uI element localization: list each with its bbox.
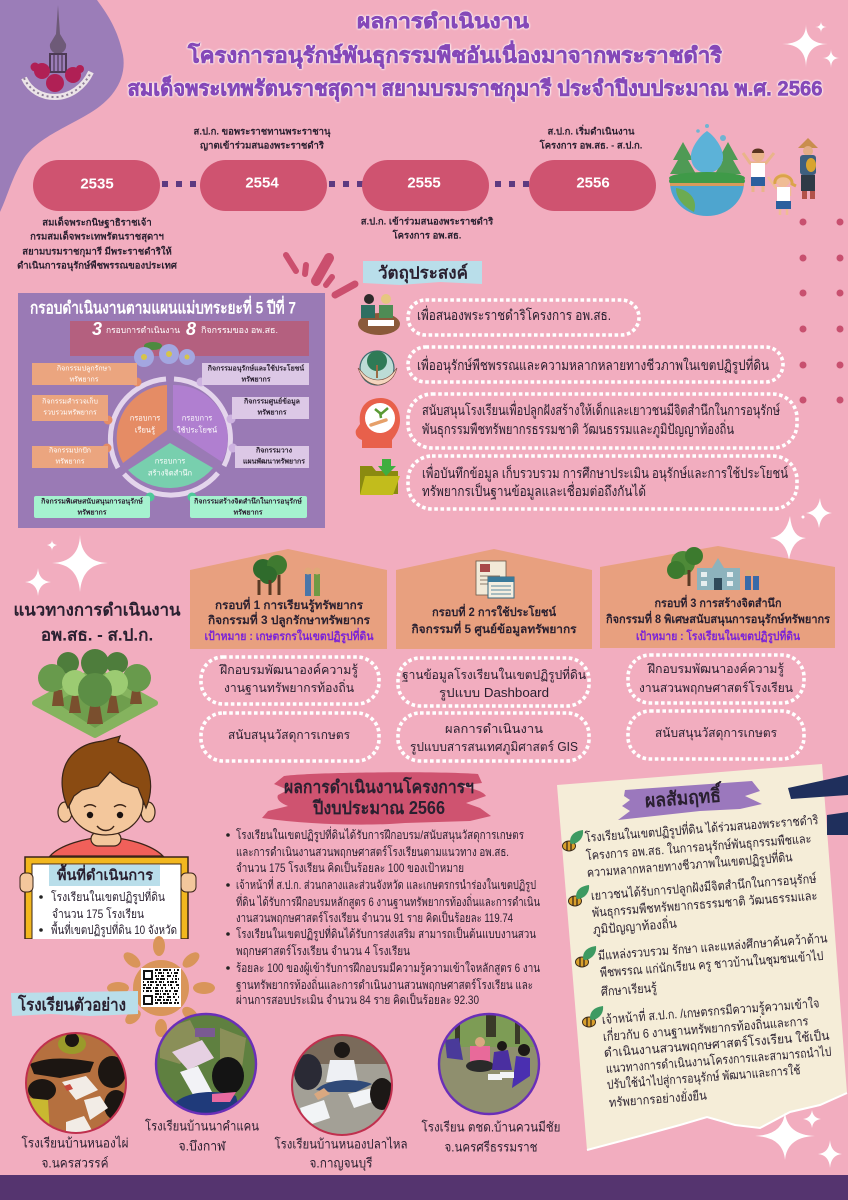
footer band — [0, 1175, 848, 1200]
icon: earth, water drop and children — [669, 124, 818, 216]
timeline — [33, 160, 656, 211]
label box: conservation use: กิจกรรมอนุรักษ์และใช้ประโยชน์ — [207, 364, 304, 372]
farmer — [798, 138, 818, 199]
label box: survey: กิจกรรมสำรวจเก็บ — [42, 396, 98, 406]
panel: framework 1 — [190, 549, 387, 761]
guideline heading: อพ.สธ. - ส.ป.ก. — [41, 626, 153, 644]
results heading: ปีงบประมาณ 2566 — [312, 798, 445, 818]
photo: Ban Na Kham Khaen school — [155, 1013, 257, 1118]
timeline note 2535 — [17, 216, 178, 272]
label box: planning: กิจกรรมวาง — [255, 446, 293, 454]
year 2555 — [362, 160, 489, 211]
outcome 4: เจ้าหน้าที่ ส.ป.ก. /เกษตรกรมีความรู้ความเข้าใจ — [601, 994, 820, 1028]
results bullet list: ผ่านการสอบประเมิน จำนวน 84 ราย คิดเป็นร้อยละ 92.30 — [236, 992, 479, 1007]
caption: school 3 — [274, 1136, 408, 1172]
activity pill: รูปแบบ Dashboard — [439, 686, 549, 701]
framework subheading band: 3 — [92, 319, 102, 339]
results heading — [262, 772, 491, 825]
year 2535 — [33, 160, 160, 211]
label box: planting — [32, 363, 137, 385]
caption: school 1: โรงเรียนบ้านหนองไผ่ — [22, 1136, 128, 1150]
framework subheading band: 8 — [186, 319, 196, 339]
outcome 4: เกี่ยวกับ 6 งานฐานทรัพยากรท้องถิ่นและการ — [602, 1012, 809, 1044]
outcome 1 — [584, 811, 819, 881]
results bullet list: งานสวนพฤกษศาสตร์โรงเรียน จำนวน 91 ราย คิดเป็นร้อยละ 119.74 — [236, 910, 513, 925]
outcome 2: พันธุกรรมพืชทรัพยากรธรรมชาติ วัฒนธรรมและ — [591, 889, 818, 921]
timeline note 2535: สยามบรมราชกุมารี มีพระราชดำริให้ — [22, 246, 172, 258]
icon: tree and school — [667, 547, 759, 590]
outcome 2 — [590, 872, 818, 938]
icon: two people with books — [358, 294, 400, 335]
timeline note 2554 — [194, 126, 331, 152]
objectives heading: วัตถุประสงค์ — [378, 262, 468, 284]
activity pill: ผลการดำเนินงาน — [445, 722, 543, 736]
outcomes heading — [618, 780, 762, 820]
label box: special support: กิจกรรมพิเศษสนับสนุนการอนุรักษ์ — [40, 496, 143, 506]
timeline note 2554: ส.ป.ก. ขอพระราชทานพระราชานุ — [194, 126, 331, 138]
year 2554: 2554 — [245, 174, 279, 192]
label box: conservation use: ทรัพยากร — [241, 376, 271, 384]
year 2556: 2556 — [576, 174, 610, 192]
house 1 — [190, 549, 387, 649]
panel: framework 2 — [396, 549, 592, 761]
pie segment: awareness: สร้างจิตสำนึก — [148, 468, 192, 478]
title — [128, 11, 822, 102]
timeline note 2555 — [361, 216, 494, 242]
activity pill: งานฐานทรัพยากรท้องถิ่น — [224, 679, 354, 695]
panel: framework 2: กรอบที่ 2 การใช้ประโยชน์ — [432, 603, 556, 619]
caption: school 2 — [145, 1118, 259, 1154]
label box: conservation use — [202, 363, 309, 385]
timeline note 2556: โครงการ อพ.สธ. - ส.ป.ก. — [539, 140, 642, 152]
timeline note 2554: ญาตเข้าร่วมสนองพระราชดำริ — [200, 140, 325, 152]
bee 4 — [582, 1006, 603, 1027]
photo: Ban Nong Phai school — [25, 1032, 128, 1134]
tape pieces — [788, 775, 848, 835]
boy — [743, 148, 774, 192]
label box: data centre: กิจกรรมศูนย์ข้อมูล — [243, 396, 300, 406]
panel: framework 3 — [600, 546, 835, 759]
cut-off strip under the board — [20, 939, 190, 942]
connector dots — [162, 181, 196, 187]
sparkles: middle right — [770, 498, 832, 560]
icons: bees — [562, 830, 603, 1027]
operating area heading — [49, 864, 160, 886]
objective 1: เพื่อสนองพระราชดำริโครงการ อพ.สธ. — [417, 306, 611, 323]
outcome 4: ปรับใช้นำไปสู่การอนุรักษ์ พัฒนาและการใช้ — [606, 1063, 801, 1093]
results bullet list: ฐานทรัพยากรท้องถิ่นและการดำเนินงานสวนพฤกษศาสตร์โรงเรียน และ — [236, 976, 533, 992]
guideline heading: แนวทางการดำเนินงาน — [14, 600, 181, 620]
timeline note 2556 — [539, 124, 642, 152]
activity pill — [201, 713, 379, 761]
QR code — [141, 968, 181, 1007]
icon: trees and farmers — [253, 555, 320, 596]
label box: protection: กิจกรรมปกปัก — [49, 446, 91, 454]
sample schools heading: โรงเรียนตัวอย่าง — [17, 994, 126, 1014]
panel: framework 2: กิจกรรมที่ 5 ศูนย์ข้อมูลทรัพยากร — [411, 620, 577, 637]
activity pill — [628, 711, 804, 759]
timeline note 2555: ส.ป.ก. เข้าร่วมสนองพระราชดำริ — [361, 216, 494, 228]
sun with QR code — [107, 936, 215, 1037]
results bullet list: โรงเรียนในเขตปฏิรูปที่ดินได้รับการส่งเสริม สามารถเป็นต้นแบบงานสวน — [236, 925, 536, 942]
panel: framework 3: กรอบที่ 3 การสร้างจิตสำนึก — [654, 594, 782, 610]
activity pill: รูปแบบสารสนเทศภูมิศาสตร์ GIS — [410, 740, 578, 755]
timeline note 2535: ดำเนินการอนุรักษ์พืชพรรณของประเทศ — [17, 260, 178, 272]
outcome 3: ศึกษาเรียนรู้ — [600, 981, 658, 1000]
outcome 4 — [601, 994, 832, 1110]
pie segment: awareness — [128, 443, 213, 488]
label box: special support — [34, 496, 150, 518]
outcomes heading: ผลสัมฤทธิ์ — [644, 780, 724, 812]
icon: head with sprout — [356, 398, 400, 448]
objective 4: ทรัพยากรเป็นฐานข้อมูลและเชื่อมต่อถึงกันได้ — [422, 482, 646, 500]
results bullet list: ร้อยละ 100 ของผู้เข้ารับการฝึกอบรมมีความรู้ความเข้าใจหลักสูตร 6 งาน — [236, 961, 540, 976]
year 2556 — [529, 160, 656, 211]
label box: data centre — [232, 396, 309, 419]
outcome 4: ดำเนินงานสวนพฤกษศาสตร์โรงเรียน ใช้เป็น — [603, 1028, 830, 1060]
caption: school 4 — [422, 1120, 560, 1154]
house 3 — [600, 546, 835, 648]
board paper — [32, 864, 181, 940]
objective 1 — [408, 300, 639, 335]
outcome 1: ความหลากหลายทางชีวภาพในเขตปฏิรูปที่ดิน — [586, 848, 793, 881]
objective 2 — [408, 347, 783, 382]
hands — [20, 873, 196, 892]
results bullet list: พฤกษศาสตร์โรงเรียน จำนวน 4 โรงเรียน — [236, 944, 410, 958]
shirt — [50, 837, 163, 856]
operating area list: โรงเรียนในเขตปฏิรูปที่ดิน — [51, 888, 165, 905]
label box: survey: รวบรวมทรัพยากร — [43, 408, 97, 416]
pie segment: awareness: กรอบการ — [155, 456, 185, 466]
connector dots — [495, 181, 529, 187]
year 2554 — [200, 160, 327, 211]
objective 3: พันธุกรรมพืชทรัพยากรธรรมชาติ วัฒนธรรมและภูมิปัญญาท้องถิ่น — [422, 420, 734, 438]
label box: planting: กิจกรรมปลูกรักษา — [57, 364, 111, 372]
panel: framework 1: กรอบที่ 1 การเรียนรู้ทรัพยากร — [215, 596, 364, 613]
timeline note 2555: โครงการ อพ.สธ. — [392, 230, 461, 242]
brush accent marks — [286, 255, 355, 295]
label box: special support: ทรัพยากร — [77, 508, 107, 516]
boy head — [58, 736, 155, 846]
activity pill: ฝึกอบรมพัฒนาองค์ความรู้ — [647, 662, 784, 677]
activity pill — [201, 657, 379, 704]
panel: framework 3: กิจกรรมที่ 8 พิเศษสนับสนุนการอนุรักษ์ทรัพยากร — [606, 610, 831, 627]
caption: school 4: จ.นครศรีธรรมราช — [444, 1140, 538, 1154]
activity pill: สนับสนุนวัสดุการเกษตร — [228, 728, 350, 743]
results bullet list: จำนวน 175 โรงเรียน คิดเป็นร้อยละ 100 ของเป้าหมาย — [236, 860, 464, 875]
panel: framework 3: เป้าหมาย : โรงเรียนในเขตปฏิรูปที่ดิน — [636, 627, 800, 644]
illustration: boy holding board — [20, 736, 196, 942]
results bullet list: โรงเรียนในเขตปฏิรูปที่ดินได้รับการฝึกอบรม/สนับสนุนวัสดุการเกษตร — [236, 826, 524, 843]
caption: school 3: โรงเรียนบ้านหนองปลาไหล — [274, 1136, 408, 1152]
operating area list: จำนวน 175 โรงเรียน — [52, 907, 144, 921]
icon: folder with download arrow — [360, 459, 400, 495]
results bullet list: เจ้าหน้าที่ ส.ป.ก. ส่วนกลางและส่วนจังหวัด และเกษตรกรนำร่องในเขตปฏิรูป — [236, 876, 536, 893]
caption: school 2: โรงเรียนบ้านนาคำแคน — [145, 1118, 259, 1134]
sparkles: bottom right — [755, 1110, 842, 1168]
connector dots — [329, 181, 363, 187]
label box: data centre: ทรัพยากร — [257, 408, 287, 416]
icon: tree grove — [35, 649, 155, 735]
activity pill: ฝึกอบรมพัฒนาองค์ความรู้ — [219, 663, 358, 678]
label box: protection: ทรัพยากร — [55, 458, 85, 466]
decorative dot column — [800, 218, 844, 404]
framework subheading band: กรอบการดำเนินงาน — [106, 325, 180, 335]
framework subheading band: กิจกรรมของ อพ.สธ. — [201, 325, 278, 335]
pie segment: learning: กรอบการ — [130, 414, 160, 422]
outcome 2: ภูมิปัญญาท้องถิ่น — [592, 915, 678, 938]
year 2555: 2555 — [407, 174, 441, 192]
operating area list: พื้นที่เขตปฏิรูปที่ดิน 10 จังหวัด — [51, 921, 177, 938]
results bullet list: ที่ดิน ได้รับการฝึกอบรมหลักสูตร 6 งานฐานทรัพยากรท้องถิ่นและการดำเนิน — [236, 893, 540, 910]
label box: awareness: ทรัพยากร — [233, 508, 263, 516]
board frame — [25, 857, 188, 939]
label box: planning: แผนพัฒนาทรัพยากร — [243, 458, 305, 466]
outcome 2: เยาวชนได้รับการปลูกฝังมีจิตสำนึกในการอนุรักษ์ — [590, 872, 817, 904]
house 2 — [396, 549, 592, 649]
objectives heading — [363, 261, 482, 285]
sparkles: middle left — [25, 535, 108, 596]
title: สมเด็จพระเทพรัตนราชสุดาฯ สยามบรมราชกุมารี ประจำปีงบประมาณ พ.ศ. 2566 — [128, 74, 822, 102]
bee 2 — [568, 885, 589, 906]
bee 3 — [576, 946, 596, 967]
caption: school 2: จ.บึงกาฬ — [178, 1138, 227, 1154]
pie segment: learning — [117, 385, 167, 463]
girl — [768, 173, 796, 215]
results heading: ผลการดำเนินงานโครงการฯ — [284, 776, 474, 797]
title: ผลการดำเนินงาน — [357, 11, 529, 33]
sparkles: top right — [782, 21, 840, 68]
label box: awareness — [190, 496, 307, 518]
framework heading: กรอบดำเนินงานตามแผนแม่บทระยะที่ 5 ปีที่ 7 — [30, 296, 296, 318]
label box: planning — [235, 446, 309, 468]
activity pill: ฐานข้อมูลโรงเรียนในเขตปฏิรูปที่ดิน — [402, 666, 586, 683]
pie number badges — [102, 378, 238, 502]
activity pill — [398, 713, 589, 761]
year 2535: 2535 — [80, 176, 114, 192]
activity pill — [398, 658, 589, 706]
objective 4 — [408, 456, 797, 509]
caption: school 1 — [22, 1136, 128, 1170]
pie segment: utilisation: กรอบการ — [182, 414, 212, 422]
objective 2: เพื่ออนุรักษ์พืชพรรณและความหลากหลายทางชีวภาพในเขตปฏิรูปที่ดิน — [417, 356, 769, 374]
photo: Khuan Mi Chai school — [438, 1013, 540, 1115]
label box: survey — [32, 395, 108, 421]
icon: hands holding plant — [358, 351, 397, 385]
bee 1 — [562, 830, 583, 851]
photo: Ban Nong Pla Lai school — [291, 1034, 394, 1136]
timeline note 2556: ส.ป.ก. เริ่มดำเนินงาน — [548, 124, 635, 138]
outcome 1: โครงการ อพ.สธ. ในการอนุรักษ์พันธุกรรมพืชและ — [585, 831, 812, 864]
results bullet list: และการดำเนินงานสวนพฤกษศาสตร์โรงเรียนตามแนวทาง อพ.สธ. — [236, 845, 509, 859]
caption: school 3: จ.กาญจนบุรี — [310, 1156, 373, 1172]
label box: planting: ทรัพยากร — [69, 376, 99, 384]
caption: school 4: โรงเรียน ตชด.บ้านควนมีชัย — [422, 1120, 560, 1134]
icon: purple flowers — [134, 342, 195, 367]
results bullet list — [226, 826, 540, 1007]
purple corner blob — [0, 0, 124, 212]
pie segment: utilisation: ใช้ประโยชน์ — [177, 426, 217, 434]
ring around pie — [110, 379, 230, 495]
guideline heading — [14, 600, 181, 644]
label box: protection — [32, 446, 108, 468]
timeline note 2535: กรมสมเด็จพระเทพรัตนราชสุดาฯ — [30, 230, 164, 242]
outcome 3 — [597, 931, 828, 1000]
activity pill: สนับสนุนวัสดุการเกษตร — [655, 726, 777, 741]
pie segment: utilisation — [173, 385, 228, 462]
objective 3 — [408, 394, 797, 448]
activity pill — [628, 655, 804, 703]
pie segment: learning: เรียนรู้ — [135, 426, 155, 434]
outcome 4: ทรัพยากรอย่างยั่งยืน — [608, 1086, 708, 1110]
title: โครงการอนุรักษ์พันธุกรรมพืชอันเนื่องมาจากพระราชดำริ — [187, 40, 723, 70]
operating area list — [39, 888, 177, 938]
operating area heading: พื้นที่ดำเนินการ — [57, 864, 153, 884]
logo — [24, 5, 91, 97]
icon: documents — [476, 561, 514, 598]
panel: framework 1: เป้าหมาย : เกษตรกรในเขตปฏิรูปที่ดิน — [204, 627, 374, 644]
panel: framework diagram — [18, 293, 325, 528]
timeline note 2535: สมเด็จพระกนิษฐาธิราชเจ้า — [42, 216, 152, 228]
activity pill: งานสวนพฤกษศาสตร์โรงเรียน — [639, 680, 793, 695]
panel: outcomes note paper — [557, 764, 848, 1150]
framework subheading band — [70, 319, 309, 356]
panel: framework 1: กิจกรรมที่ 3 ปลูกรักษาทรัพยากร — [208, 611, 371, 628]
label box: awareness: กิจกรรมสร้างจิตสำนึกในการอนุรักษ์ — [193, 496, 302, 506]
caption: school 1: จ.นครสวรรค์ — [42, 1156, 108, 1170]
